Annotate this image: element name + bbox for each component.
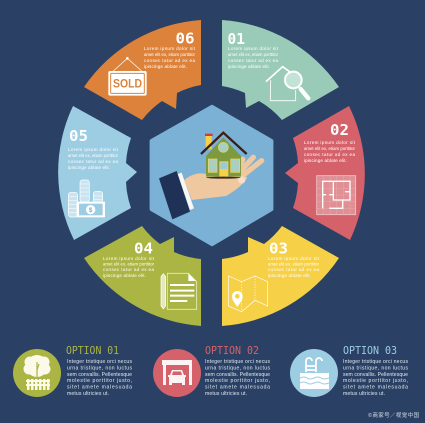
- jacket sleeve: [159, 171, 190, 219]
- icon: garage with car: [153, 349, 201, 397]
- icon: sold sign: SOLD: [113, 76, 142, 90]
- text block option 01: Integer tristique orci necus: [67, 359, 132, 365]
- hand: [184, 157, 262, 200]
- text block 04: consec tatur ad ex ea: [103, 267, 154, 272]
- number 06: 06: [176, 30, 194, 48]
- icon: floor plan: [317, 176, 356, 215]
- icon: map with pin: [228, 276, 268, 312]
- sector shape 03: [222, 226, 339, 326]
- number 02: 02: [330, 121, 349, 139]
- text block 04: ipiscinge ablate elit.: [103, 273, 146, 278]
- sector shape 06: [84, 20, 201, 120]
- panel: 02 red sector: [285, 106, 365, 240]
- text block 03: amet elit ex, etiam porttitor: [268, 262, 319, 266]
- sector shape 02: [285, 106, 365, 240]
- text block 02: ipiscinge ablate elit.: [304, 158, 347, 163]
- heading option 01: OPTION 01: [66, 344, 119, 357]
- text block option 02: urna tristique, non luctus: [205, 365, 270, 371]
- icon: coins and banknote: $: [89, 207, 93, 214]
- text block option 01: molestie porttitor justo,: [67, 378, 132, 384]
- icon: house with magnifier: [266, 67, 308, 101]
- text block 06: ipiscinge ablate elit.: [144, 64, 187, 69]
- text block option 03: [343, 359, 408, 397]
- number 04: 04: [134, 240, 153, 258]
- text block option 01: metus ultricies ut.: [67, 391, 109, 397]
- text block 01: ipiscinge ablate elit.: [228, 64, 270, 69]
- central hexagon: [152, 107, 271, 244]
- text block option 02: [205, 359, 270, 397]
- sector shape 04: [84, 226, 201, 326]
- text block 03: [268, 256, 320, 278]
- text block option 03: molestie porttitor justo,: [343, 378, 408, 384]
- option 03: [290, 344, 408, 397]
- text block 06: amet elit ex, etiam porttitor: [144, 52, 195, 57]
- panel: 01 teal sector: [222, 20, 339, 120]
- text block 01: amet elit ex, etiam porttitor: [228, 52, 278, 57]
- text block 03: consec tatur ad ex ea: [268, 267, 319, 272]
- text block 01: consec tatur ad ex ea: [228, 58, 278, 63]
- text block option 03: metus ultricies ut.: [343, 391, 385, 397]
- sector shape 05: [58, 106, 137, 240]
- text block 05: ipiscinge ablate elit.: [68, 165, 110, 170]
- text block option 01: sitet amete malesuada: [67, 385, 132, 391]
- text block 06: consec tatur ad ex ea: [144, 58, 195, 63]
- text block 05: Lorem ipsum dolor sit: [68, 147, 119, 152]
- text block 04: amet elit ex, etiam porttitor: [103, 262, 154, 266]
- option 01: [13, 344, 132, 397]
- watermark: ©商家号／视觉中国: [368, 411, 419, 419]
- panel: 04 olive sector: [84, 226, 201, 326]
- text block option 01: sem convallis. Pellentesque: [67, 372, 132, 378]
- icon: pen and document: [161, 273, 197, 309]
- option 02: [153, 344, 270, 397]
- text block 04: Lorem ipsum dolor sit: [103, 256, 155, 261]
- panel: 06 orange sector: [84, 20, 201, 120]
- text block 01: [228, 46, 279, 69]
- text block 02: consec tatur ad ex ea: [304, 152, 355, 157]
- heading option 02: OPTION 02: [205, 344, 259, 357]
- text block 02: Lorem ipsum dolor sit: [304, 140, 356, 145]
- text block option 03: urna tristique, non luctus: [343, 365, 408, 371]
- text block option 02: metus ultricies ut.: [205, 391, 247, 397]
- heading option 03: OPTION 03: [343, 344, 397, 357]
- panel: 05 light blue sector: [58, 106, 137, 240]
- text block option 02: sitet amete malesuada: [205, 385, 270, 391]
- text block option 03: sem convallis. Pellentesque: [343, 372, 408, 378]
- house: [201, 133, 247, 179]
- text block 01: Lorem ipsum dolor sit: [228, 46, 279, 51]
- text block option 02: Integer tristique orci necus: [205, 359, 270, 365]
- text block option 03: Integer tristique orci necus: [343, 359, 408, 365]
- text block 05: consec tatur ad ex ea: [68, 159, 118, 164]
- icon: swimming pool: [290, 349, 338, 397]
- text block option 03: sitet amete malesuada: [343, 385, 408, 391]
- panel: 03 yellow sector: [222, 226, 339, 326]
- text block 04: [103, 256, 155, 278]
- icon: hand holding house: [159, 133, 262, 219]
- shirt cuff: [178, 173, 194, 210]
- text block option 01: urna tristique, non luctus: [67, 365, 132, 371]
- number 05: 05: [69, 127, 88, 145]
- icon: tree and fence: [13, 349, 61, 397]
- text block 05: [68, 147, 119, 170]
- text block 02: amet elit ex, etiam porttitor: [304, 146, 355, 151]
- number 01: 01: [228, 30, 245, 48]
- text block 02: [304, 140, 356, 163]
- text block 06: Lorem ipsum dolor sit: [144, 46, 196, 51]
- text block option 02: molestie porttitor justo,: [205, 378, 270, 384]
- text block 03: ipiscinge ablate elit.: [268, 273, 311, 278]
- text block option 01: [67, 359, 132, 397]
- text block 06: [144, 46, 196, 69]
- text block 03: Lorem ipsum dolor sit: [268, 256, 320, 261]
- text block option 02: sem convallis. Pellentesque: [205, 372, 270, 378]
- number 03: 03: [269, 240, 288, 258]
- text block 05: amet elit ex, etiam porttitor: [68, 153, 118, 158]
- sector shape 01: [222, 20, 339, 120]
